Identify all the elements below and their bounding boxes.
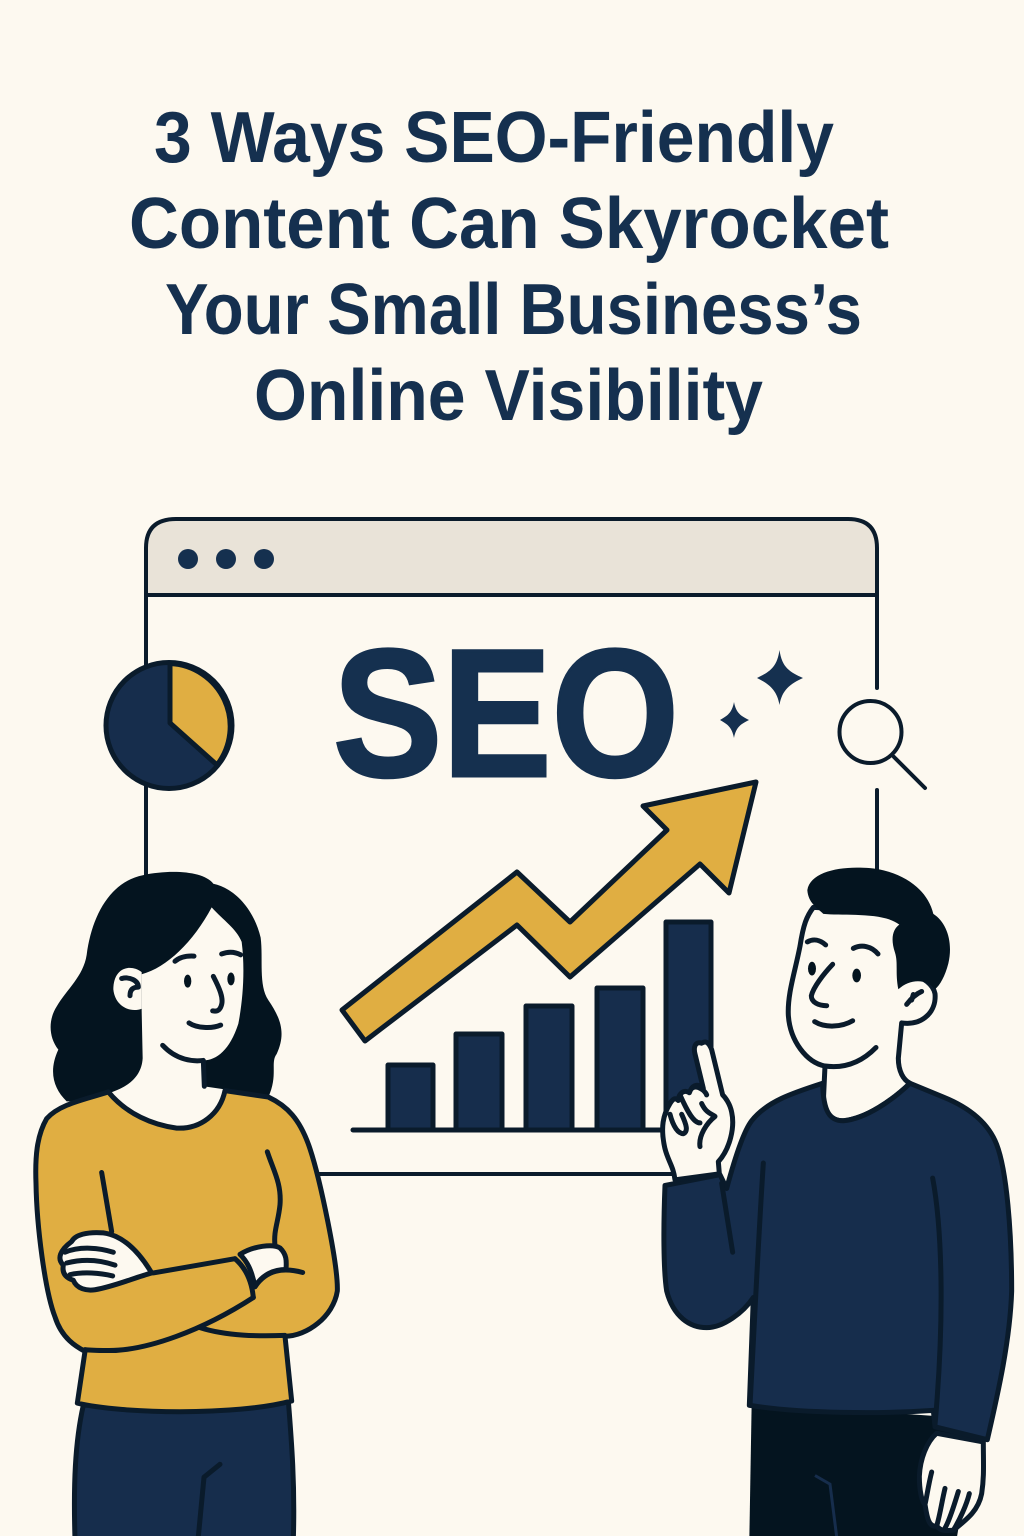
man lower hand [919,1433,984,1531]
man lower fingers [925,1472,969,1530]
title [129,98,889,436]
SEO heading: SEO [333,611,679,815]
man sweater [664,1083,1012,1440]
pie chart icon [106,662,232,788]
woman far arm line [235,1259,303,1297]
window title bar [146,519,877,595]
man jaw and neck fill [825,1047,876,1067]
woman brows nose mouth [163,952,241,1086]
window left edge [144,595,148,890]
title: Online Visibility [254,356,763,436]
woman fingers [65,1248,115,1276]
window right edge [875,595,879,880]
sparkles [720,650,803,738]
woman sweater [36,1091,337,1412]
window bottom edge [300,1172,672,1176]
man brows nose mouth [807,940,878,1026]
man face and neck [788,907,935,1121]
woman far hand [240,1246,286,1287]
man ear [907,991,922,1004]
title: Your Small Business’s [165,270,862,350]
man sweater folds [722,1163,941,1425]
woman sweater folds [85,1152,285,1351]
man pointing hand [663,1042,733,1180]
woman pants [74,1401,294,1536]
title: 3 Ways SEO-Friendly [154,98,834,178]
chart baseline [353,1128,668,1132]
title: Content Can Skyrocket [129,184,889,264]
rising arrow [342,782,756,1041]
man pointing up [663,868,1012,1536]
man pants crease [815,1476,837,1536]
woman hair [51,872,282,1101]
woman face and neck [110,907,243,1128]
woman eyes [184,972,235,988]
woman with crossed arms [36,872,337,1536]
woman pants crease [198,1464,220,1536]
magnifying glass icon [840,701,925,788]
man eyes [808,962,861,982]
man pants [749,1403,973,1536]
woman ear [113,968,142,1010]
bar chart [353,922,711,1130]
browser window [146,519,877,1174]
man hair [807,868,950,989]
man hand finger lines [670,1087,715,1147]
window control dots [178,549,274,569]
woman near hand [60,1233,152,1290]
